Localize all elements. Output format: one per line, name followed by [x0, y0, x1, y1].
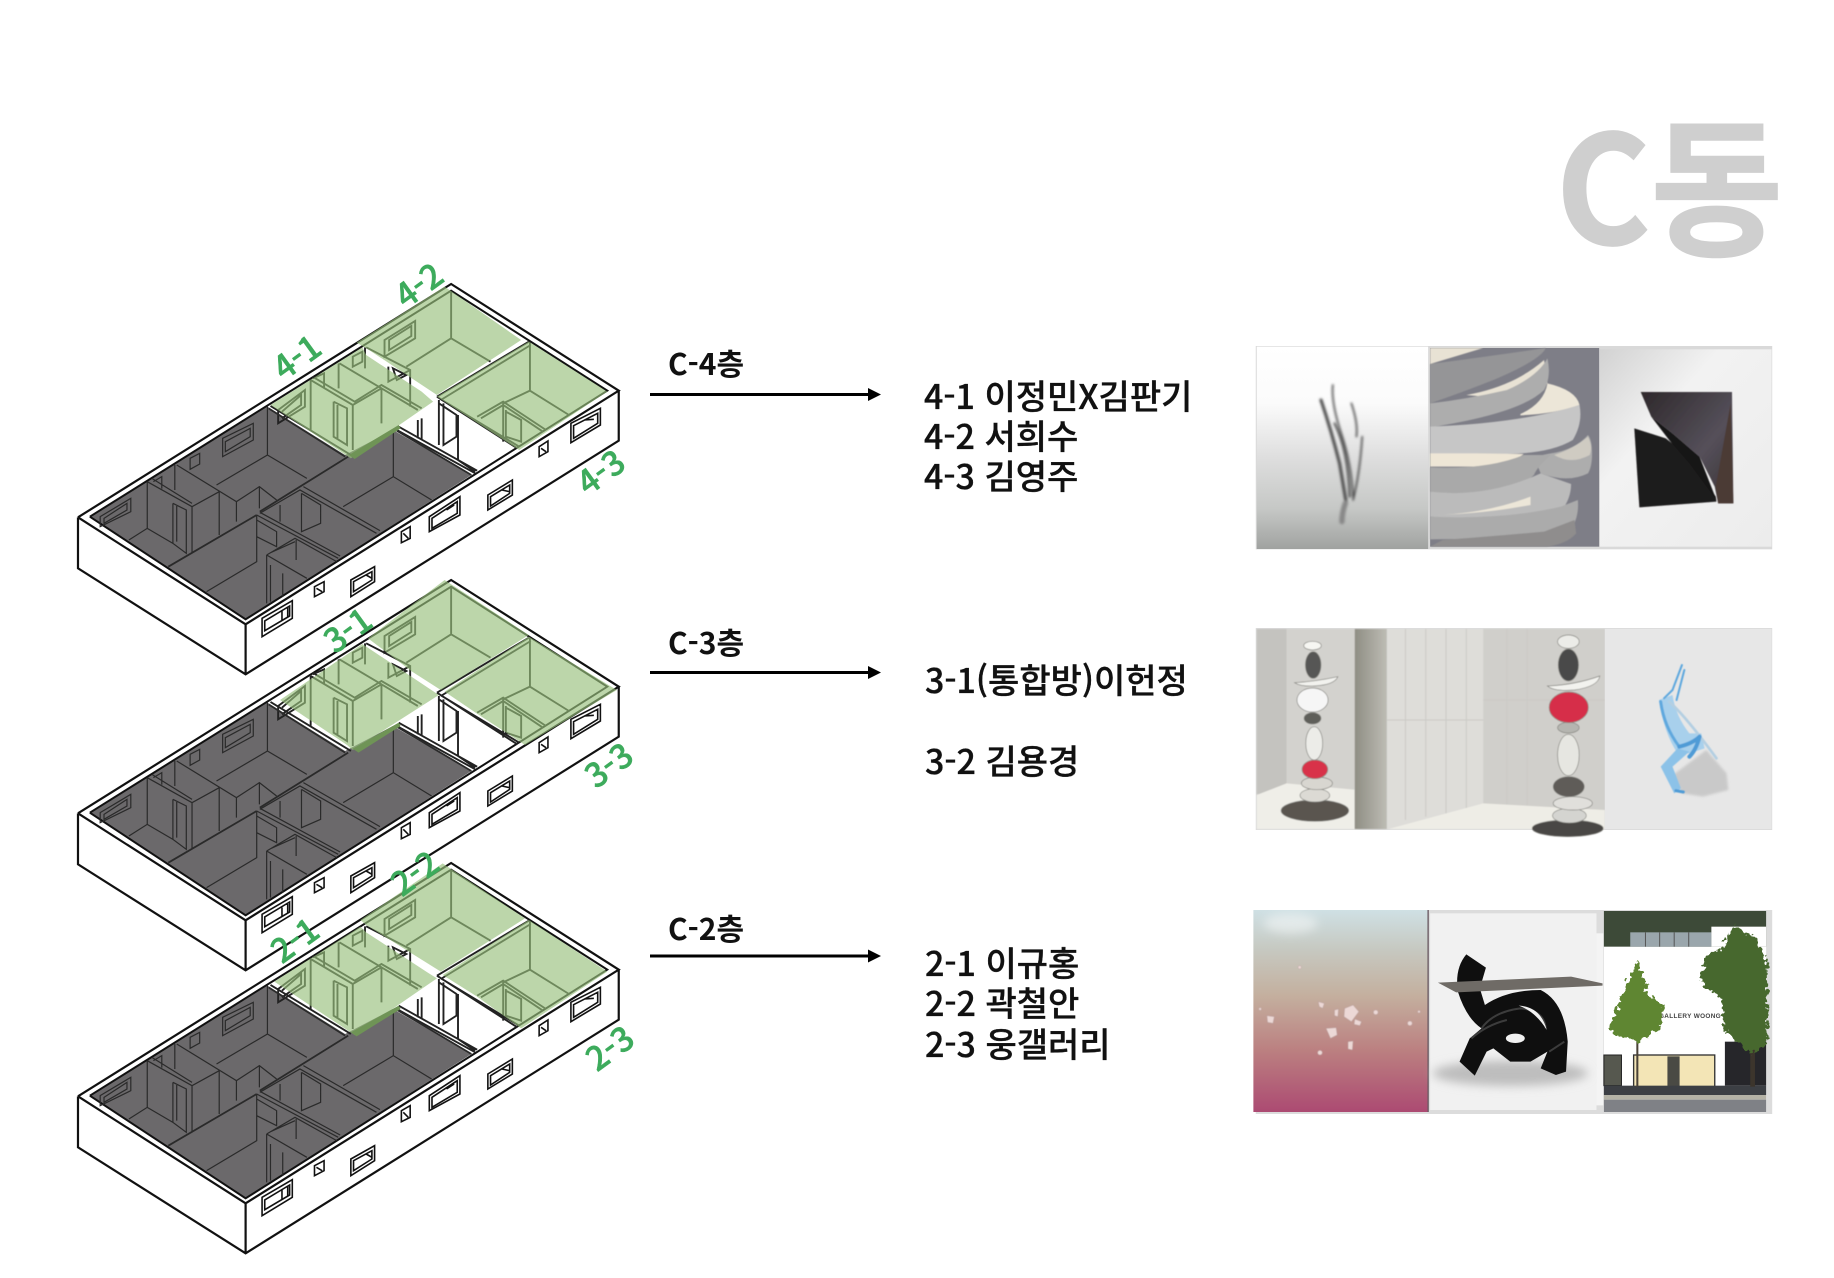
photo strip floor 4 [1256, 346, 1772, 549]
photo: dark wall relief [1600, 349, 1772, 547]
artist list floor 4 [924, 370, 1192, 499]
label 3-1: 3-1 [313, 595, 381, 663]
photo: spiral ribbon sculpture [1430, 348, 1599, 547]
floor 4 axonometric [78, 284, 619, 674]
artist list floor 4: 4-1 이정민X김판기 [924, 370, 1192, 419]
zone 3-3 [445, 637, 617, 745]
photo strip floor 2 [1253, 910, 1772, 1114]
zone 3-2 [368, 580, 529, 690]
photo: gallery building [1604, 911, 1767, 1112]
artist list floor 3: 3-2 김용경 [925, 735, 1079, 784]
label 3-3: 3-3 [574, 730, 642, 798]
label 4-2: 4-2 [384, 250, 452, 318]
floor 2 zone labels [260, 838, 643, 1081]
photo: blue glass figure [1605, 629, 1772, 829]
floor 2 axonometric [78, 863, 619, 1253]
artist list floor 2: 2-2 곽철안 [925, 977, 1079, 1026]
arrow C-2 [650, 950, 881, 962]
label 4-1: 4-1 [262, 322, 330, 390]
arrow C-3 [650, 666, 881, 679]
zone 2-2 [360, 863, 525, 972]
photo: black ribbon table [1430, 913, 1603, 1110]
photo: gallery building: GALLERY WOONG [1659, 1013, 1721, 1020]
artist list floor 2: 2-3 웅갤러리 [925, 1018, 1111, 1067]
photo strip floor 3 [1256, 628, 1772, 837]
artist list floor 2: 2-1 이규홍 [925, 937, 1079, 986]
artist list floor 4: 4-2 서희수 [924, 410, 1078, 459]
zone 4-3 [437, 342, 607, 450]
floor 4 zone labels [262, 250, 634, 505]
artist list floor 2 [925, 937, 1111, 1067]
photo: grass-like sculpture [1257, 347, 1428, 549]
arrow C-4 [650, 388, 881, 401]
artist list floor 3: 3-1(통합방)이헌정 [925, 654, 1188, 703]
photo: pink gradient crystals [1253, 910, 1429, 1112]
label 2-3: 2-3 [575, 1013, 643, 1081]
artist list floor 4: 4-3 김영주 [924, 450, 1078, 499]
floor label C-3: C-3층 [668, 619, 744, 663]
floor 3 zone labels [313, 595, 642, 798]
zone 4-2 [357, 287, 521, 395]
photo: stone tower with small red stone [1257, 629, 1358, 829]
label 4-3: 4-3 [566, 437, 634, 505]
floor 3 axonometric [78, 580, 619, 970]
photo: stone tower with large red stone [1355, 629, 1605, 837]
ribbon sculpture [1457, 954, 1568, 1076]
floor label C-4: C-4층 [668, 340, 744, 384]
zone 4-1 [270, 347, 433, 458]
label 2-2: 2-2 [380, 838, 448, 906]
artist list floor 3 [925, 654, 1188, 784]
label 2-1: 2-1 [260, 905, 328, 973]
title: C동 [1556, 71, 1783, 288]
zone 2-3 [443, 920, 607, 1028]
zone 3-1 [280, 644, 439, 750]
zone 2-1 [274, 927, 437, 1035]
floor label C-2: C-2층 [668, 905, 744, 949]
